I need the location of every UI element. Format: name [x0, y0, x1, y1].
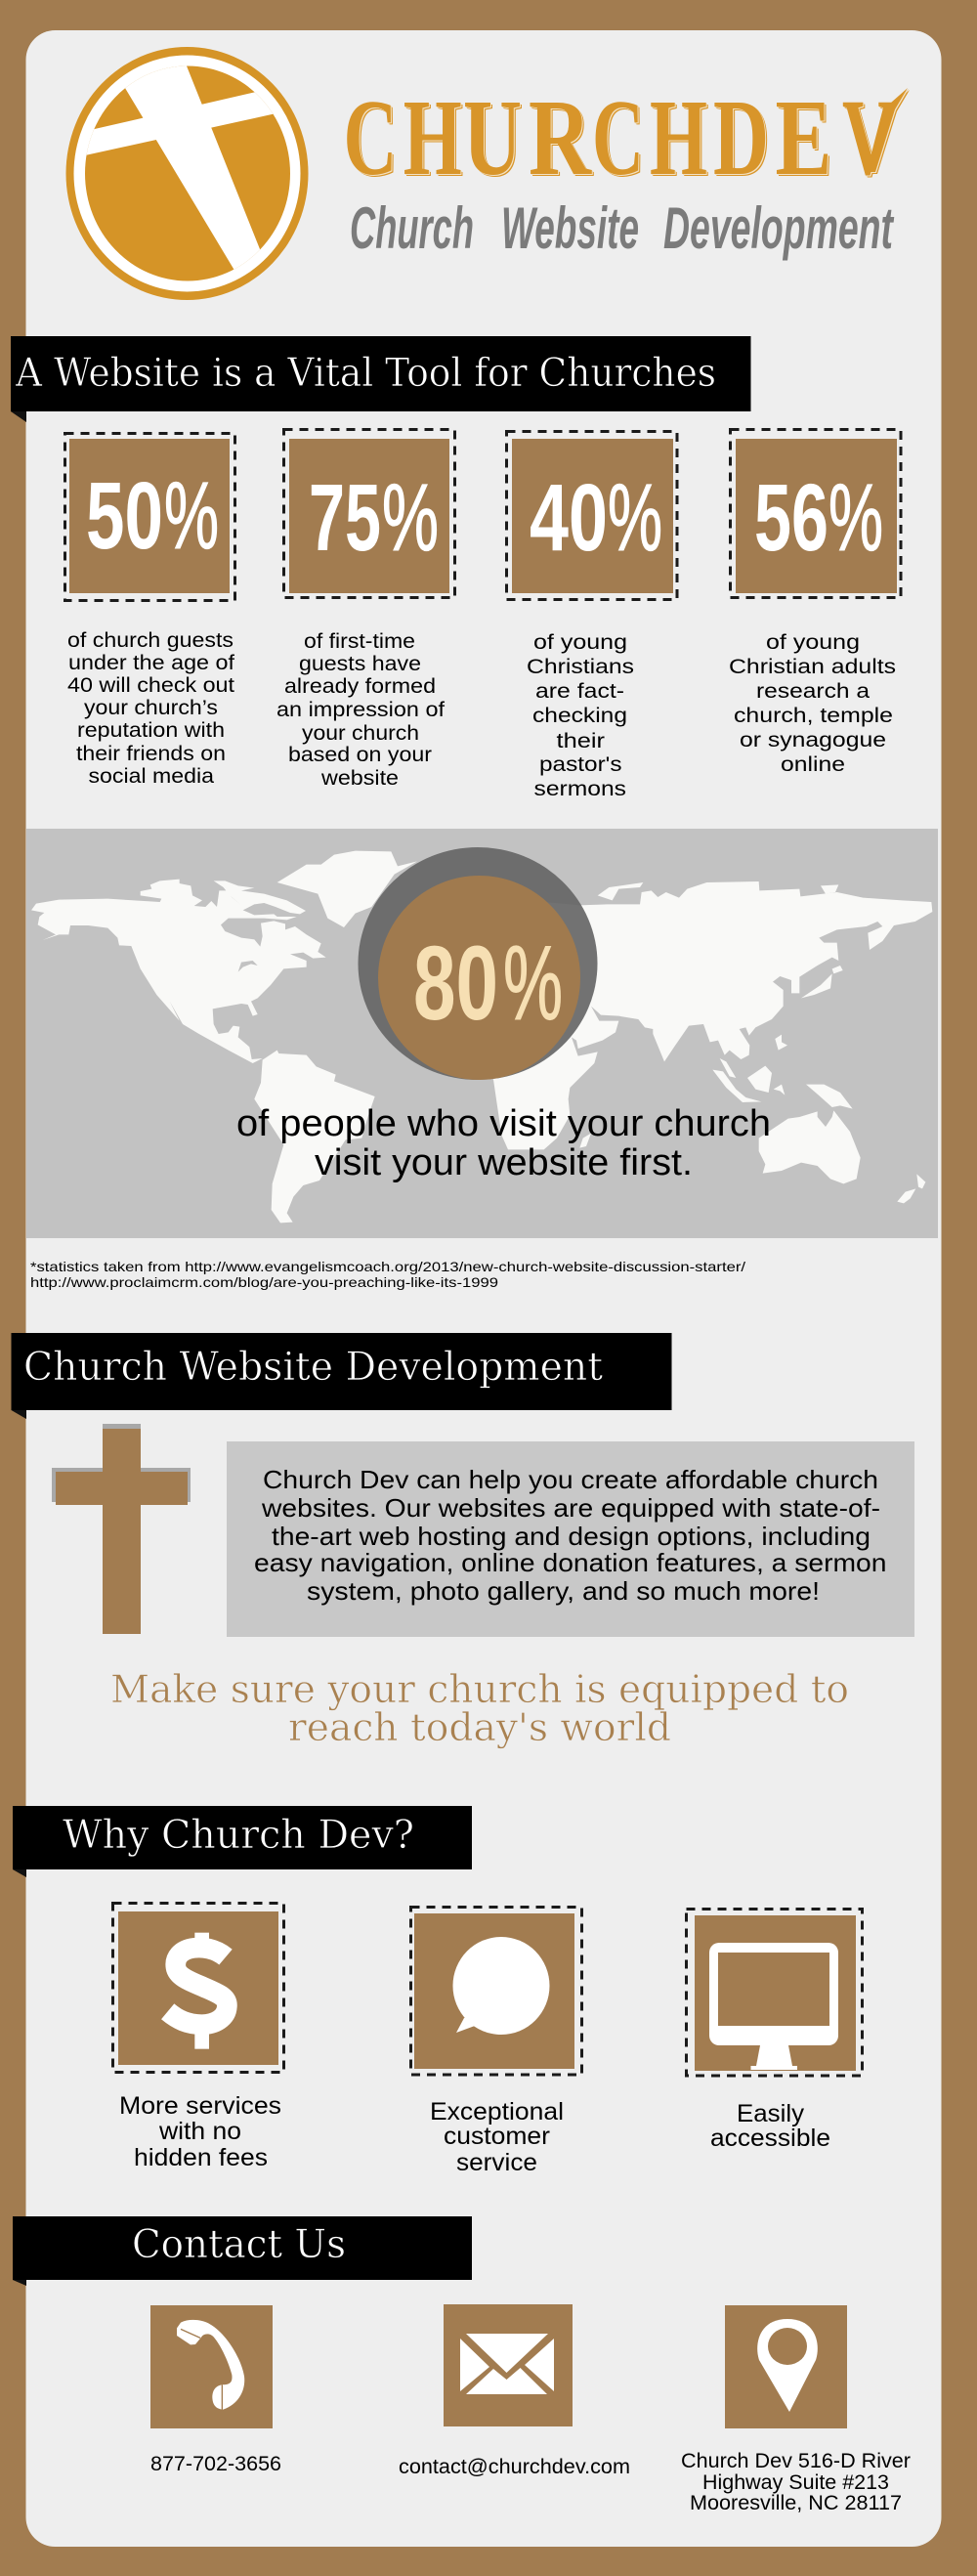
logo tagline: Church Website Development: Website	[501, 195, 639, 261]
banner: A Website is a Vital Tool for Churches	[11, 336, 750, 422]
stat: 75%: your church	[302, 722, 419, 745]
stat: 56%: or synagogue	[740, 729, 886, 751]
banner: Contact Us	[13, 2216, 472, 2286]
panel: development description: easy navigation, online donation features, a sermon	[254, 1548, 886, 1577]
stat: 50%: of church guests	[67, 629, 234, 652]
stat: 56%: research a	[756, 680, 870, 703]
stat: 40%: pastor's	[539, 753, 621, 776]
stat: 56%: 56	[754, 464, 828, 571]
map caption	[236, 1103, 771, 1183]
stat: 75%: of first-time	[304, 630, 415, 653]
stat: 56%: Christian adults	[729, 656, 896, 678]
stat: 40%: are fact-	[535, 680, 624, 703]
feature: customer service: customer	[444, 2123, 550, 2150]
contact: email: contact@churchdev.com	[399, 2456, 630, 2478]
stat: 50%: their friends on	[76, 743, 226, 765]
stat: 75%	[276, 430, 455, 790]
stat: 50%: social media	[88, 765, 214, 788]
stat: 40%: of young	[533, 631, 627, 654]
logo wordmark: CHURCHDEV	[344, 78, 908, 198]
feature: easily accessible: accessible	[710, 2125, 830, 2152]
logo tagline: Church Website Development	[350, 195, 895, 261]
map caption: visit your website first.	[315, 1142, 693, 1183]
logo tagline: Church Website Development: Church	[350, 195, 474, 261]
stat: 56%: of young	[766, 631, 860, 654]
feature: no hidden fees: More services	[119, 2092, 281, 2120]
panel: development description: system, photo gallery, and so much more!	[307, 1576, 820, 1606]
contact: phone: 877-702-3656	[150, 2453, 281, 2475]
logo wordmark: CHURCHDEV: C	[344, 78, 397, 198]
panel: development description	[227, 1441, 914, 1637]
logo wordmark: CHURCHDEV: H	[404, 78, 462, 198]
logo wordmark: CHURCHDEV: R	[529, 78, 592, 198]
stat: 40%	[506, 432, 677, 800]
panel: development description: websites. Our websites are equipped with state-of-	[261, 1493, 880, 1523]
stat: 50%: 50	[86, 462, 163, 569]
logo wordmark: CHURCHDEV: C	[592, 78, 644, 198]
map background	[26, 829, 938, 1238]
contact: address	[681, 2305, 911, 2514]
banner: Church Website Development: Church Website Development	[23, 1345, 603, 1390]
feature: easily accessible	[686, 1910, 862, 2152]
stat: 50%: your church’s	[84, 697, 218, 719]
banner: Church Website Development	[12, 1333, 672, 1419]
stat: 50%	[64, 434, 234, 788]
footnote: statistics sources: http://www.proclaimcrm.com/blog/are-you-preaching-like-its-1999	[30, 1274, 498, 1290]
stat: 75%: %	[382, 464, 439, 571]
icon: cross	[52, 1424, 191, 1634]
stat: 75%: guests have	[299, 653, 421, 675]
panel: world map 80%	[26, 829, 938, 1238]
feature: no hidden fees	[113, 1904, 283, 2171]
stat: 40%: their	[557, 730, 605, 752]
feature: no hidden fees: with no	[158, 2118, 241, 2145]
feature: customer service: service	[456, 2149, 537, 2176]
logo wordmark: CHURCHDEV: U	[463, 78, 522, 198]
stat: 75%: website	[320, 767, 399, 790]
circle: inner	[378, 876, 580, 1080]
stat: 75%: already formed	[284, 675, 436, 698]
contact: address: Church Dev 516-D River	[681, 2450, 911, 2472]
banner: Why Church Dev?	[13, 1806, 472, 1877]
stat: 75%: 75	[309, 464, 381, 571]
stat: 40%: checking	[532, 705, 627, 727]
logo wordmark: CHURCHDEV: V	[842, 78, 893, 198]
footnote: statistics sources: *statistics taken from http://www.evangelismcoach.org/2013/new-church-website-discussion-starter/	[30, 1259, 745, 1274]
stat: 40%: %	[608, 464, 662, 571]
chart: world map silhouette	[31, 851, 932, 1223]
contact: address: Mooresville, NC 28117	[690, 2492, 902, 2514]
panel: development description: Church Dev can help you create affordable church	[263, 1465, 878, 1494]
feature: easily accessible: Easily	[737, 2100, 805, 2127]
stat number: 80%: %	[503, 923, 563, 1042]
footnote: statistics sources	[30, 1259, 745, 1290]
tagline: Make sure your church: reach today's world	[288, 1706, 671, 1750]
feature: no hidden fees: hidden fees	[134, 2144, 268, 2171]
feature: customer service: Exceptional	[430, 2098, 564, 2125]
icon: monitor	[709, 1943, 838, 2070]
banner: Contact Us: Contact Us	[132, 2222, 346, 2267]
stat: 50%: 40 will check out	[67, 674, 234, 697]
stat: 50%: under the age of	[68, 652, 234, 674]
icon: phone handset	[177, 2320, 244, 2410]
stat: 56%: online	[781, 753, 845, 776]
banner: A Website is a Vital Tool for Churches: A Website is a Vital Tool for Churches	[15, 351, 716, 396]
map caption: of people who visit your church	[236, 1103, 771, 1144]
logo wordmark: CHURCHDEV: E	[776, 78, 832, 198]
stat: 56%: %	[828, 464, 883, 571]
stat: 40%: Christians	[527, 656, 634, 678]
stat number: 80%: 80	[413, 923, 498, 1042]
panel: development description: the-art web hosting and design options, including	[272, 1522, 871, 1551]
icon: map pin	[757, 2319, 818, 2412]
contact: email	[399, 2304, 630, 2478]
circle: outer ring	[358, 847, 598, 1080]
feature: customer service	[410, 1908, 582, 2176]
stat: 75%: based on your	[288, 744, 432, 766]
stat: 56%: church, temple	[734, 705, 893, 727]
banner: Why Church Dev?: Why Church Dev?	[63, 1813, 414, 1858]
stat: 56%	[729, 430, 901, 776]
stat: 40%: 40	[530, 464, 608, 571]
stat: 40%: sermons	[533, 778, 626, 800]
icon: envelope	[460, 2334, 554, 2394]
contact: phone	[150, 2305, 281, 2475]
logo: cross emblem	[59, 47, 309, 300]
icon: dollar sign	[168, 1933, 227, 2049]
stat: 50%: reputation with	[77, 719, 225, 742]
tagline: Make sure your church: Make sure your church is equipped to	[110, 1668, 849, 1712]
logo wordmark: CHURCHDEV: D	[713, 78, 769, 198]
icon: speech bubble	[453, 1937, 549, 2035]
contact: address: Highway Suite #213	[702, 2471, 889, 2494]
stat: 75%: an impression of	[276, 699, 445, 721]
tagline: Make sure your church	[110, 1668, 849, 1750]
stat: 50%: %	[164, 462, 219, 569]
logo wordmark: CHURCHDEV: H	[650, 78, 707, 198]
